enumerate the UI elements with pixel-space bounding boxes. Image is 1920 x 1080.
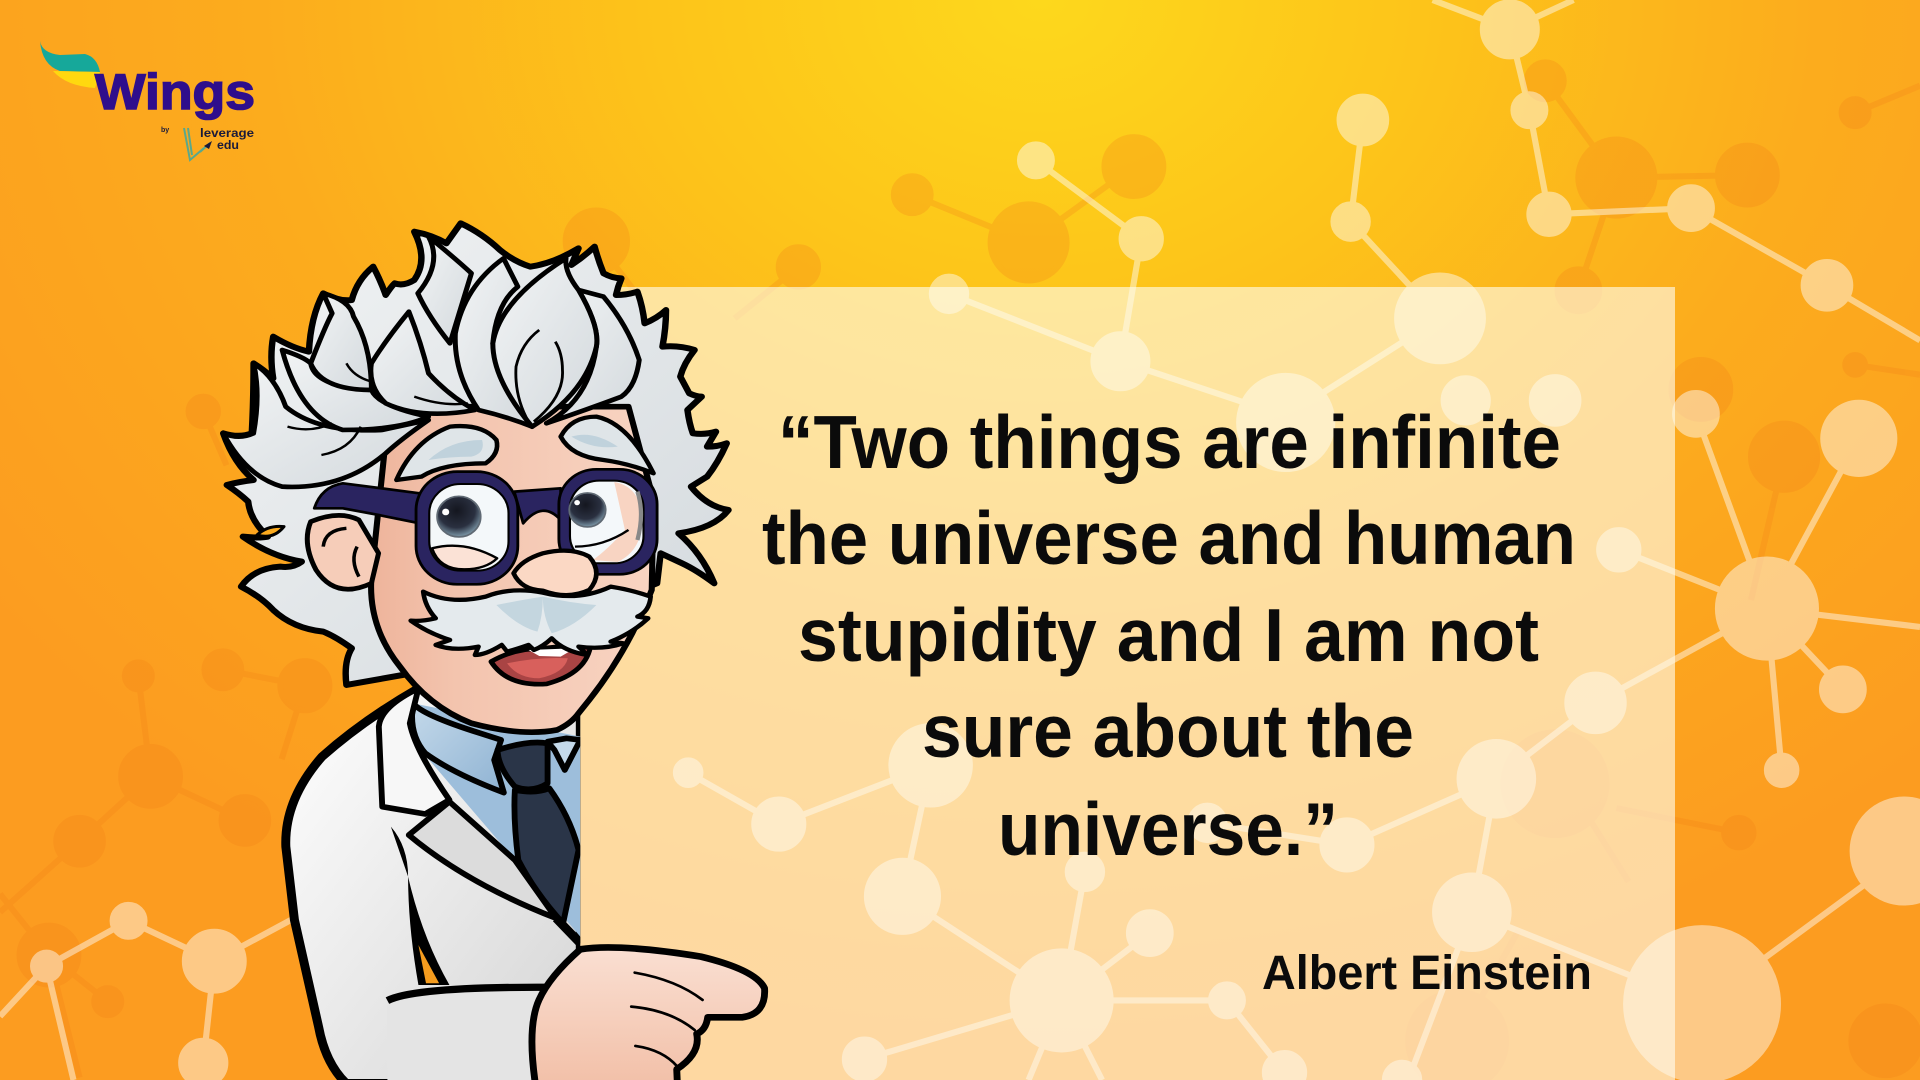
nose	[514, 551, 596, 595]
hand pointing right	[532, 947, 765, 1080]
eyes and lenses	[429, 481, 644, 571]
logo tagline: leverage	[200, 126, 254, 140]
hair gap near ear	[257, 526, 284, 536]
logo tagline	[161, 126, 254, 160]
logo: Wings by leverage edu	[40, 41, 255, 160]
quote panel	[580, 287, 1675, 1080]
body with lab coat, shirt and tie	[286, 688, 580, 1080]
teeth	[529, 648, 575, 657]
quote text: “Two things are infinite	[778, 400, 1561, 484]
back hair silhouette	[223, 223, 729, 685]
quote text: stupidity and I am not	[798, 593, 1539, 677]
head with hair, glasses and face	[223, 223, 729, 732]
quote text: sure about the	[922, 689, 1414, 773]
glasses	[314, 469, 657, 584]
attribution: Albert Einstein: Albert Einstein	[1262, 947, 1592, 1000]
logo wordmark: Wings	[95, 64, 255, 120]
mouth	[491, 643, 591, 684]
logo tagline: edu	[217, 138, 239, 152]
tongue highlight	[507, 658, 568, 678]
logo tagline: by	[161, 127, 169, 134]
ear	[307, 515, 379, 589]
quote text: the universe and human	[762, 496, 1576, 580]
front hair lobes	[223, 237, 639, 487]
eyebrow shading	[429, 435, 618, 460]
moustache	[411, 587, 651, 655]
eyebrows	[396, 426, 497, 480]
quote text: universe.”	[998, 787, 1338, 871]
face	[371, 407, 654, 732]
right lens	[569, 481, 644, 563]
quote text	[762, 400, 1576, 871]
moustache shading	[496, 597, 596, 633]
left lens	[429, 484, 509, 571]
logo swoosh	[40, 41, 100, 88]
cartoon scientist character	[223, 223, 765, 1080]
